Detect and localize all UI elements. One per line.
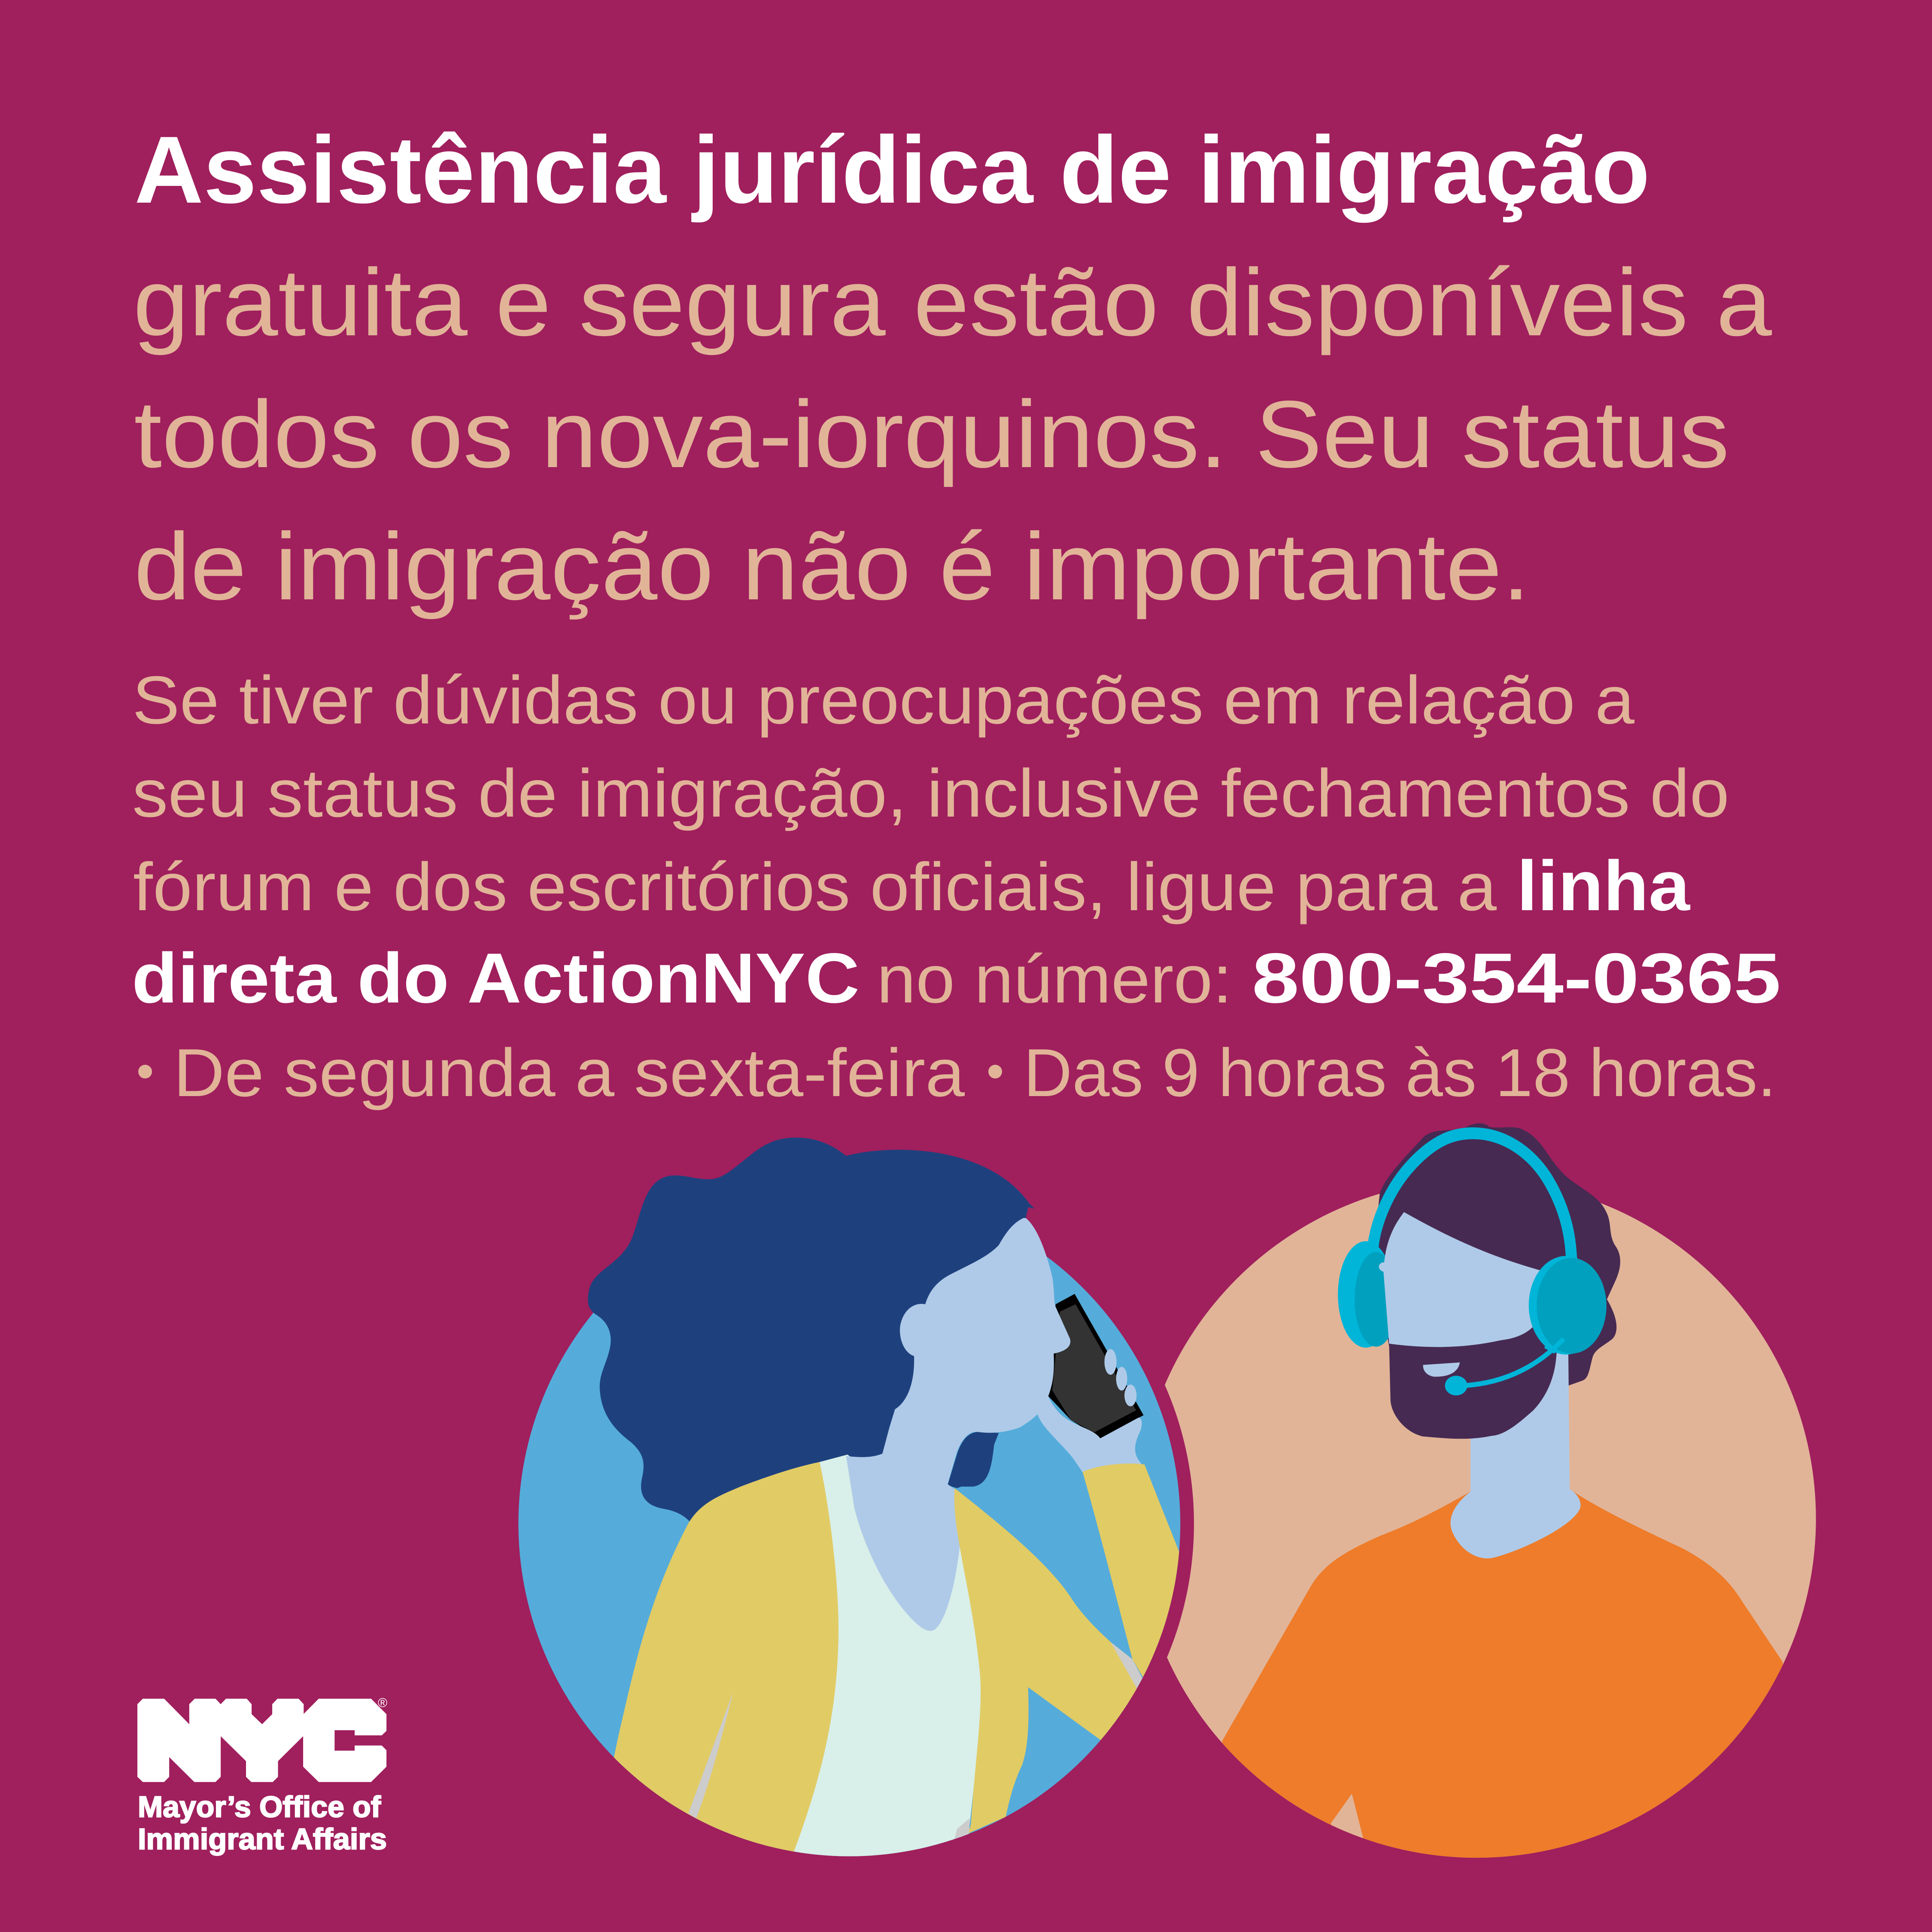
left ear cup (1338, 1241, 1397, 1348)
jacket left (614, 1462, 838, 1852)
jacket right (954, 1488, 1139, 1833)
schedule: days: De segunda a sexta-feira (173, 1035, 965, 1111)
fingers (1104, 1349, 1136, 1406)
neck (1451, 1351, 1580, 1558)
face highlight (1379, 1262, 1408, 1273)
jacket left shadow (688, 1691, 733, 1818)
logo: NYC Mayor's Office of Immigrant Affairs (137, 1696, 387, 1856)
hand (1037, 1395, 1145, 1474)
schedule: hours: Das 9 horas às 18 horas. (1024, 1035, 1776, 1111)
orange shirt (1222, 1489, 1783, 1858)
body line 4 middle: no número: (877, 942, 1232, 1017)
hotline emphasis: linha: linha (1517, 846, 1690, 925)
right ear cup (1529, 1256, 1607, 1355)
beard (1389, 1327, 1557, 1439)
hair behind neck (948, 1432, 999, 1488)
bullet 1 (138, 1065, 152, 1078)
sleeve (1083, 1464, 1183, 1681)
jacket shadow bottom (954, 1818, 969, 1839)
heading block (133, 117, 1772, 620)
hair (588, 1138, 1035, 1521)
heading line 2: gratuita e segura estão disponíveis a (133, 249, 1772, 356)
registered mark: ® (378, 1696, 387, 1710)
separating ring (504, 1179, 1194, 1868)
phone number: 800-354-0365 (1252, 939, 1781, 1018)
hotline emphasis: direta do ActionNYC: direta do ActionNYC (132, 939, 860, 1018)
skin: face, neck and chest (846, 1218, 1070, 1631)
phone (1048, 1294, 1144, 1438)
heading line 1: Assistência jurídica de imigração (134, 117, 1650, 223)
bullet 2 (988, 1065, 1002, 1078)
blue circle (518, 1191, 1180, 1856)
hair (1373, 1123, 1620, 1385)
headband (1373, 1133, 1571, 1260)
microphone (1445, 1339, 1564, 1395)
heading line 3: todos os nova-iorquinos. Seu status (134, 381, 1729, 488)
heading line 4: de imigração não é importante. (134, 513, 1530, 620)
NYC mark (137, 1699, 386, 1782)
logo text line 2: Immigrant Affairs (138, 1823, 387, 1856)
sleeve shadow (1111, 1642, 1145, 1694)
body line 1: Se tiver dúvidas ou preocupações em relação a (132, 662, 1634, 738)
mint top (794, 1455, 981, 1856)
face (1383, 1212, 1547, 1347)
body text block (132, 662, 1781, 1111)
peach circle (1137, 1179, 1816, 1858)
body line 3: fórum e dos escritórios oficiais, ligue para a (133, 849, 1497, 925)
clothes (614, 1462, 1179, 1852)
logo text line 1: Mayor’s Office of (138, 1790, 381, 1823)
mouth (1423, 1362, 1460, 1377)
illustration: man with headset (1165, 1123, 1816, 1858)
body line 2: seu status de imigração, inclusive fechamentos do (132, 756, 1729, 831)
illustration: woman on phone (518, 1138, 1183, 1883)
